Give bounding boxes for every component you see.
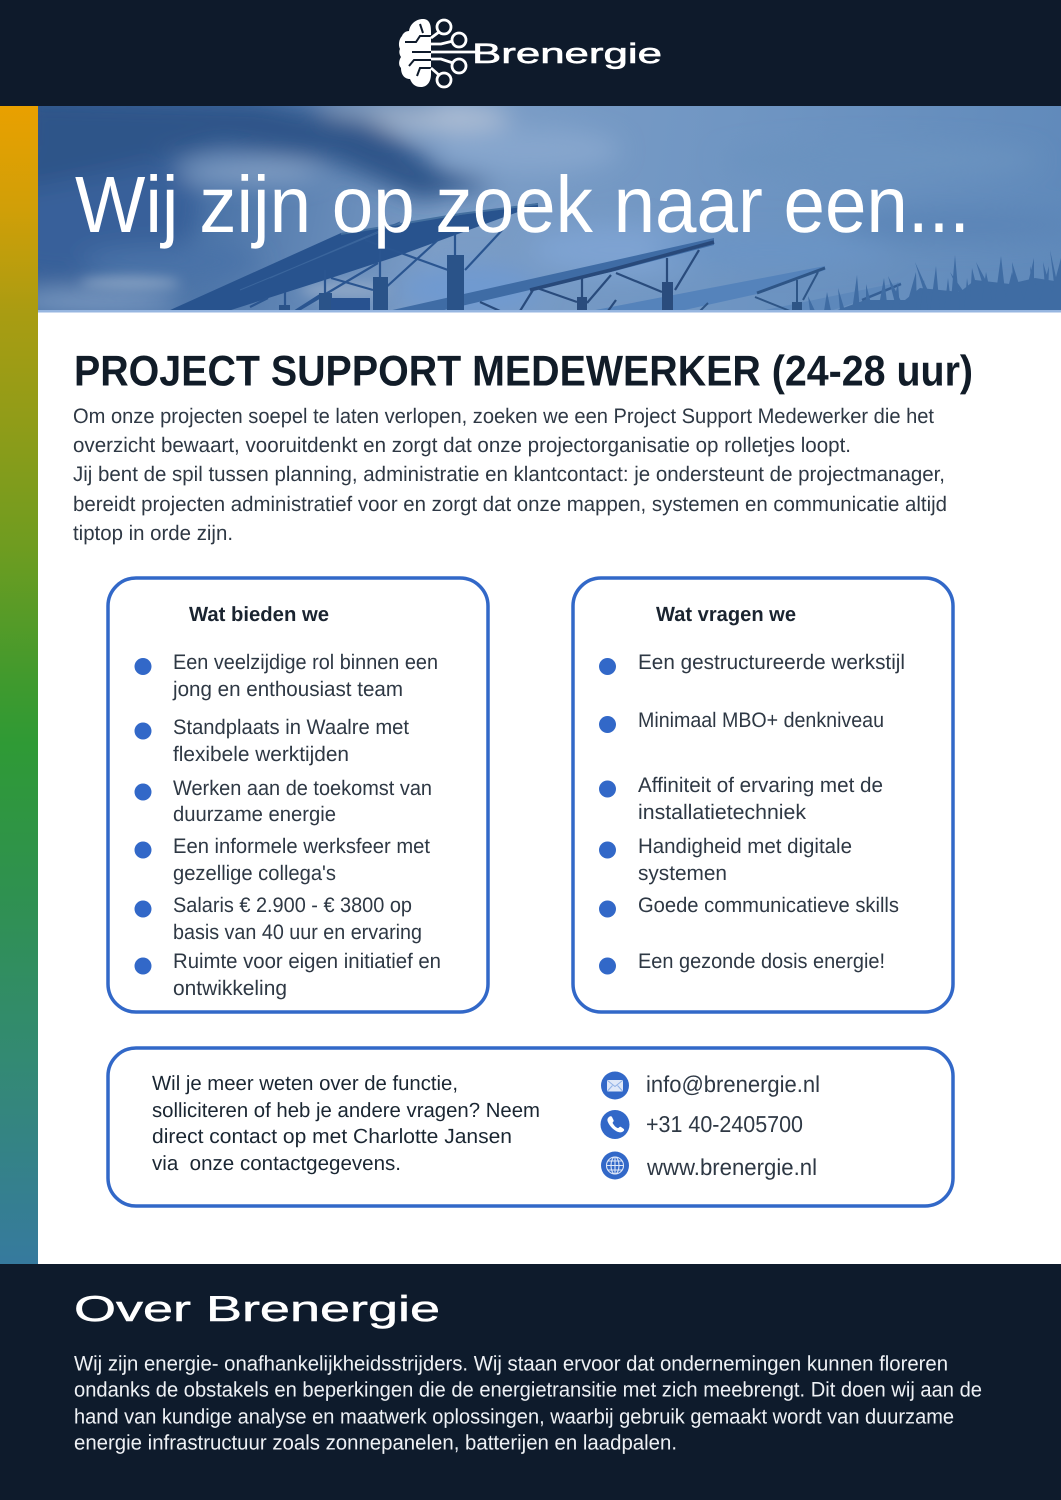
list item: digitale systemen: systemen <box>638 862 727 885</box>
list item: werksfeer <box>134 835 430 885</box>
hero bottom line <box>38 310 1061 312</box>
footer text: energie infrastructuur zoals zonnepanelen, batterijen en laadpalen. <box>74 1432 677 1454</box>
panel: contact <box>108 1048 953 1206</box>
footer text: hand van kundige analyse en maatwerk oplossingen, waarbij gebruik gemaakt wordt van duurzame <box>74 1406 954 1428</box>
side gradient bar <box>0 106 38 1264</box>
list item: werksfeer: Een informele werksfeer met <box>173 835 430 858</box>
list item: energie: Een gezonde dosis energie! <box>638 950 885 973</box>
phone number: +31 40-2405700 <box>646 1111 803 1137</box>
list item: toekomst: Werken aan de toekomst van <box>173 777 432 800</box>
list item: affiniteit <box>599 774 883 824</box>
intro text: overzicht bewaart, vooruitdenkt en zorgt dat onze projectorganisatie op rolletjes loopt. <box>73 434 851 457</box>
list item: toekomst: duurzame energie <box>173 803 336 826</box>
footer text: ondanks de obstakels en beperkingen die de energietransitie met zich meebrengt. Dit doen wij aan de <box>74 1378 982 1402</box>
hero title: Wij zijn op zoek naar een... <box>75 160 970 249</box>
intro text <box>73 405 947 545</box>
logo: Brenergie <box>399 19 662 87</box>
email address: info@brenergie.nl <box>646 1071 820 1097</box>
list item: standplaats: flexibele werktijden <box>173 743 349 766</box>
sky <box>38 106 1061 312</box>
list item: salaris: basis van 40 uur en ervaring <box>173 921 422 944</box>
intro text: bereidt projecten administratief voor en zorgt dat onze mappen, systemen en communicatie altijd <box>73 493 947 516</box>
footer text: Wij zijn energie- onafhankelijkheidsstrijders. Wij staan ervoor dat ondernemingen kunnen floreren <box>74 1352 948 1376</box>
list item: communicatie: Goede communicatieve skills <box>638 894 899 917</box>
list item: initiatief: ontwikkeling <box>173 977 287 1000</box>
intro text: Om onze projecten soepel te laten verlopen, zoeken we een Project Support Medewerker die het <box>73 405 934 428</box>
grass <box>808 250 1061 311</box>
list item: salaris <box>134 894 422 944</box>
job title heading: PROJECT SUPPORT MEDEWERKER (24-28 uur) <box>74 348 973 396</box>
list item: standplaats: Standplaats in Waalre met <box>173 716 409 739</box>
panel heading: Wat bieden we <box>189 603 329 626</box>
footer text <box>74 1352 982 1454</box>
list item: rol <box>134 651 438 701</box>
list item: initiatief: Ruimte voor eigen initiatief en <box>173 950 441 973</box>
list item: standplaats <box>134 716 409 766</box>
wordmark: Brenergie <box>472 38 662 69</box>
solar panel 4 <box>760 282 901 311</box>
solar panel 1 <box>168 203 538 312</box>
list item: affiniteit: installatietechniek <box>638 801 807 824</box>
footer heading: Over Brenergie <box>74 1288 440 1329</box>
list item: affiniteit: Affiniteit of ervaring met de <box>638 774 883 797</box>
contact text: Wil je meer weten over de functie, <box>152 1072 458 1095</box>
list item: toekomst <box>134 777 432 826</box>
list item: initiatief <box>134 950 441 1000</box>
contact text: solliciteren of heb je andere vragen? Neem <box>152 1099 540 1122</box>
list item: werksfeer: gezellige collega's <box>173 862 336 885</box>
hero banner with solar panels <box>38 106 1061 310</box>
panel: wat bieden we <box>108 578 488 1012</box>
icon: phone <box>600 1110 630 1139</box>
solar panel 3 <box>590 266 825 312</box>
icon: circuit brain <box>399 19 476 87</box>
solar panel far right <box>840 292 963 311</box>
list item: digitale systemen <box>599 835 852 885</box>
header band <box>0 0 1061 106</box>
contact text <box>152 1072 540 1175</box>
list item: rol: jong en enthousiast team <box>172 678 403 701</box>
list item: denkniveau: Minimaal MBO+ denkniveau <box>638 709 884 732</box>
intro text: Jij bent de spil tussen planning, administratie en klantcontact: je ondersteunt de projectmanager, <box>73 463 945 486</box>
contact text: via onze contactgegevens. <box>152 1152 401 1175</box>
website: www.brenergie.nl <box>646 1154 817 1180</box>
list item: digitale systemen: Handigheid met digitale <box>638 835 852 858</box>
list item: salaris: Salaris € 2.900 - € 3800 op <box>173 894 412 917</box>
list item: rol: Een veelzijdige rol binnen een <box>173 651 438 674</box>
footer band <box>0 1264 1061 1500</box>
icon: email <box>601 1072 629 1100</box>
icon: globe <box>601 1152 629 1180</box>
panel: wat vragen we <box>573 578 953 1012</box>
panel heading: Wat vragen we <box>656 603 796 626</box>
list item: werkstijl: Een gestructureerde werkstijl <box>638 651 905 674</box>
contact text: direct contact op met Charlotte Jansen <box>152 1125 512 1148</box>
solar panel 2 <box>388 238 714 312</box>
intro text: tiptop in orde zijn. <box>73 522 233 545</box>
